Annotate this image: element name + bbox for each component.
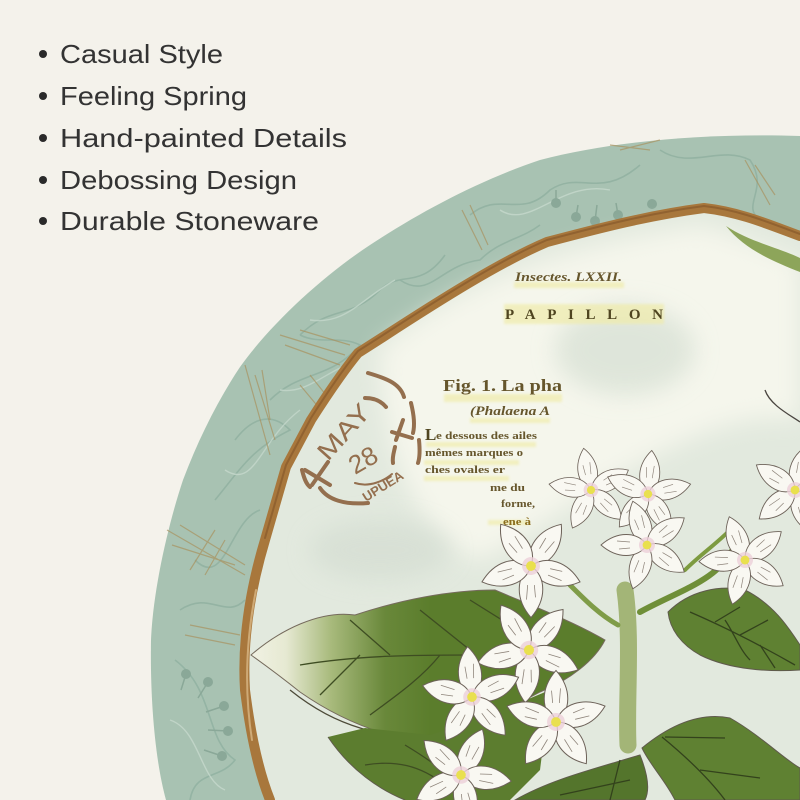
feature list: Casual Style [60, 39, 223, 69]
page text printed on plate: PAPILLON [505, 307, 663, 323]
flower 7 [478, 604, 578, 702]
flower 1 [548, 448, 629, 529]
page text printed on plate: mêmes marques o [425, 447, 524, 459]
flower 10 [416, 728, 512, 800]
brown rim band [244, 206, 800, 800]
well glaze shading [310, 225, 800, 580]
postmark stamp: MAY [312, 398, 377, 466]
page text printed on plate: L [425, 425, 436, 444]
top right leaf sliver [726, 226, 800, 272]
postmark stamp: 28 [343, 440, 383, 480]
plate rim: sage glaze [151, 135, 800, 800]
feature list [39, 39, 347, 236]
page text printed on plate: ches ovales er [425, 464, 505, 476]
feature list: Feeling Spring [60, 81, 247, 111]
page text printed on plate: forme, [501, 498, 535, 510]
flower 3 [600, 500, 685, 590]
page text printed on plate: (Phalaena A [470, 403, 550, 418]
flower 9 [506, 670, 606, 764]
flower 4 [481, 524, 581, 618]
embossed dots: top rim [551, 190, 657, 226]
feature list: Durable Stoneware [60, 206, 319, 236]
feature list: Debossing Design [60, 165, 297, 195]
flower 8 [422, 646, 520, 741]
page text printed on plate: Fig. 1. La pha [443, 376, 563, 395]
embossed dots: left rim [181, 669, 233, 761]
large left leaf [251, 590, 605, 745]
page text printed on plate: e dessous des ailes [436, 430, 538, 442]
right leaf [668, 588, 800, 671]
moth antenna sketch [765, 390, 800, 422]
plate well [244, 208, 800, 800]
page text printed on plate [424, 269, 664, 528]
page text printed on plate: Insectes. LXXII. [514, 269, 622, 284]
white flowers [394, 433, 800, 800]
plate [151, 135, 800, 800]
lower left leaf lobe [328, 690, 550, 800]
postmark stamp [302, 373, 420, 505]
flower 6 [756, 450, 800, 526]
page text printed on plate: me du [490, 482, 525, 494]
page text printed on plate: ene à [503, 516, 532, 528]
bottom center leaf [515, 755, 648, 800]
feature list: Hand-painted Details [60, 123, 347, 153]
flower 5 [698, 516, 784, 605]
branch stems [570, 530, 735, 745]
postmark stamp: UPUEA [360, 467, 407, 505]
bottom right leaf [642, 717, 800, 800]
flower 2 [607, 450, 692, 528]
